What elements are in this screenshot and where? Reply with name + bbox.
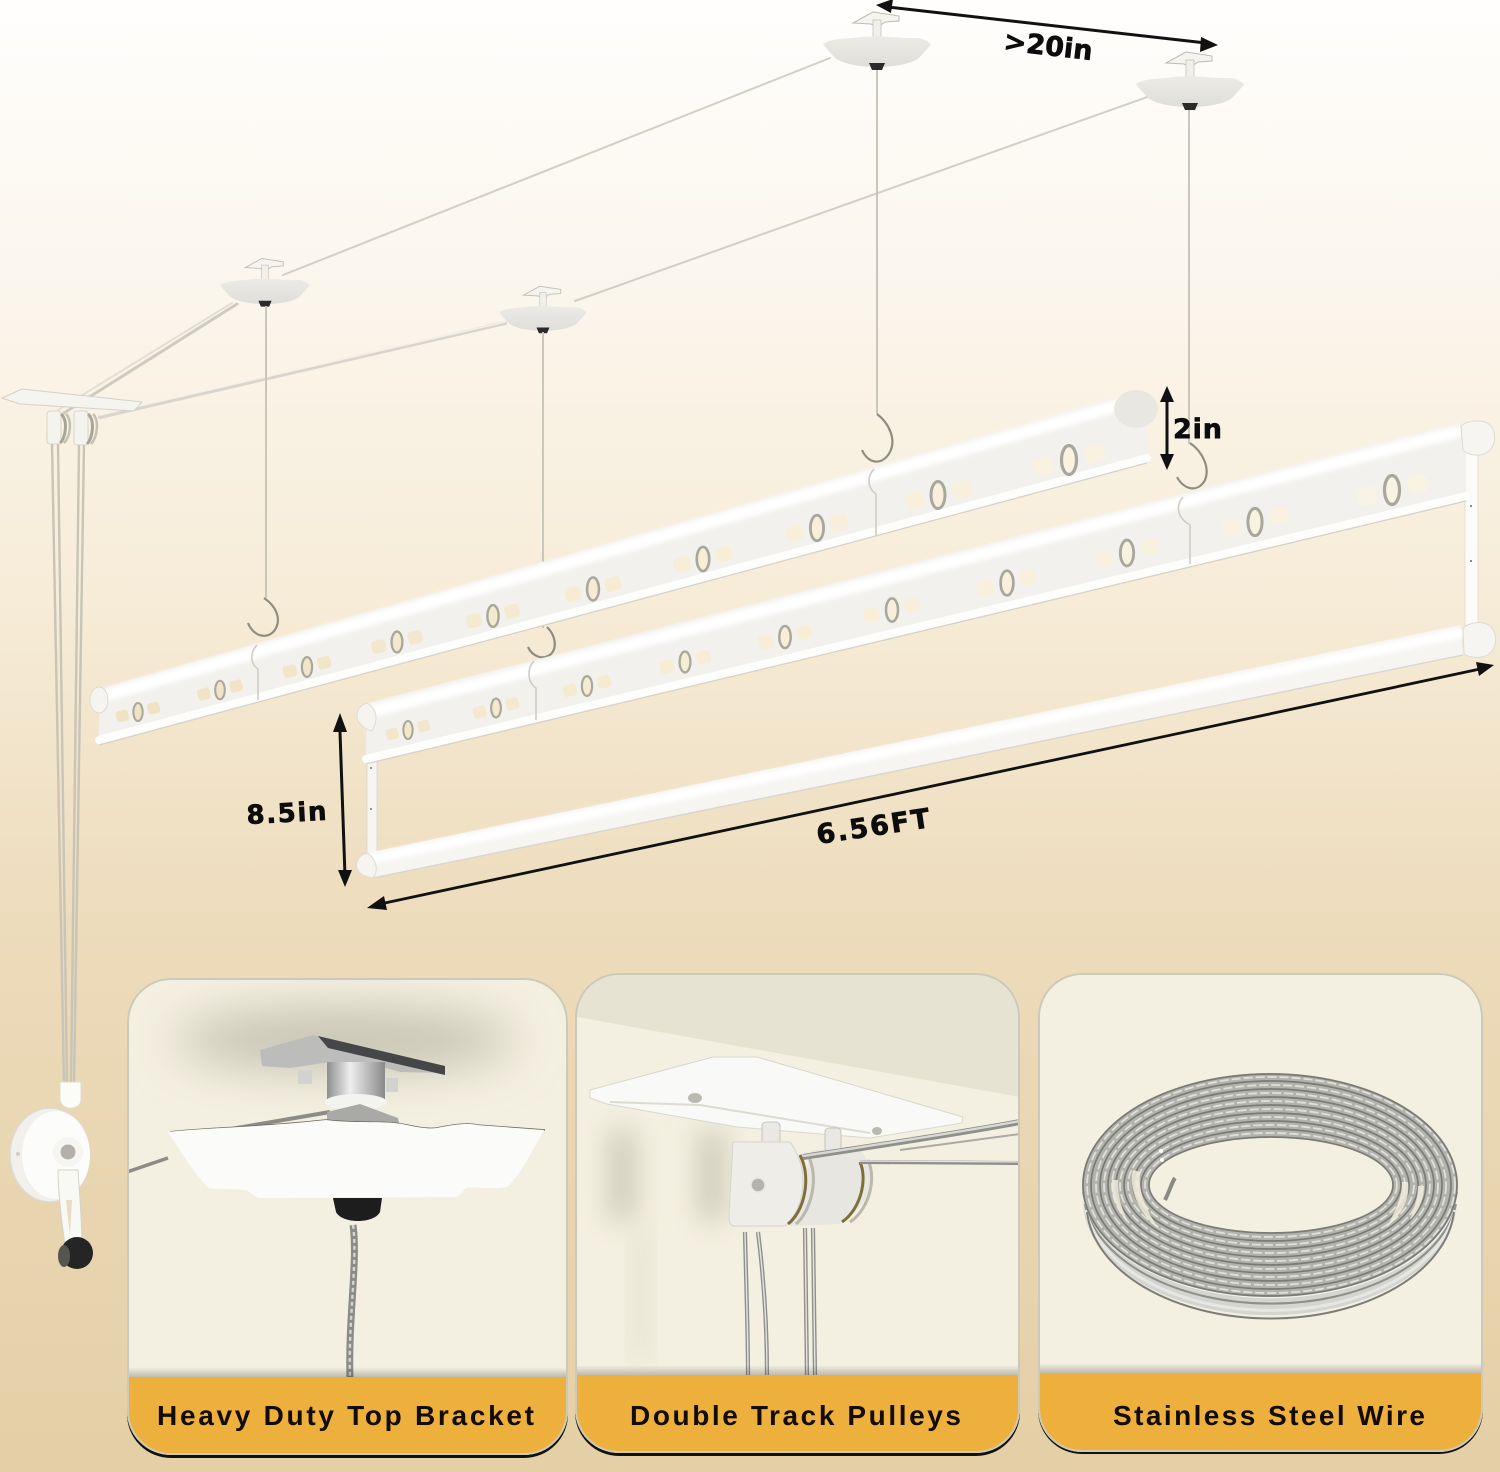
rail joints	[252, 469, 876, 700]
rail joints	[529, 497, 1190, 720]
ceiling plate and pulleys	[2, 389, 142, 445]
dimension: 8.5 inch height: 8.5in	[246, 797, 327, 831]
steel cables	[745, 1121, 1020, 1375]
mounting plate	[590, 1057, 963, 1138]
label band	[129, 1368, 566, 1377]
panel: heavy duty top bracket: Heavy Duty Top Bracket	[157, 1400, 534, 1431]
hanging wires	[266, 70, 1189, 628]
panel: double track pulleys	[575, 973, 1020, 1456]
lower rod	[356, 623, 1496, 878]
dimension: 2 inch drop: 2in	[1173, 414, 1222, 445]
dimension: 2 inch drop	[1160, 386, 1222, 470]
wire coil	[1082, 1073, 1458, 1319]
rear drying rail	[90, 390, 1158, 745]
panel: double track pulleys: Double Track Pulleys	[630, 1400, 961, 1431]
ceiling plane	[575, 973, 1020, 1097]
hand crank winder	[10, 1082, 93, 1269]
bracket: rear right	[823, 12, 931, 70]
panel: heavy duty top bracket	[127, 978, 568, 1458]
rail hooks	[248, 414, 1207, 657]
dimension: spacing over 20 inches: >20in	[1002, 26, 1094, 67]
dimension: 6.56 feet length: 6.56FT	[814, 803, 932, 851]
panel: stainless steel wire: Stainless Steel Wire	[1113, 1400, 1425, 1431]
label band	[1040, 1364, 1481, 1373]
dimension: 8.5 inch height	[246, 713, 352, 887]
bracket: front right	[1136, 52, 1244, 110]
bracket: rear left	[220, 258, 310, 307]
bracket: front left	[499, 286, 587, 333]
soft wall shadows	[610, 1130, 724, 1220]
lift wires	[52, 444, 84, 1085]
top bracket	[127, 1035, 545, 1378]
ceiling shadow	[175, 1008, 515, 1072]
rail slots	[115, 443, 1106, 723]
pulley blocks	[729, 1122, 872, 1226]
frame end posts	[367, 452, 1478, 856]
dimension: 6.56 feet length	[367, 662, 1494, 910]
open gaps between loops	[1112, 1170, 1424, 1230]
front drying rail	[356, 421, 1496, 878]
ceiling cables	[58, 58, 1150, 417]
rail slots	[385, 473, 1429, 741]
dimension: spacing over 20 inches	[876, 0, 1218, 67]
panel: stainless steel wire	[1038, 973, 1483, 1454]
label band	[577, 1366, 1018, 1375]
